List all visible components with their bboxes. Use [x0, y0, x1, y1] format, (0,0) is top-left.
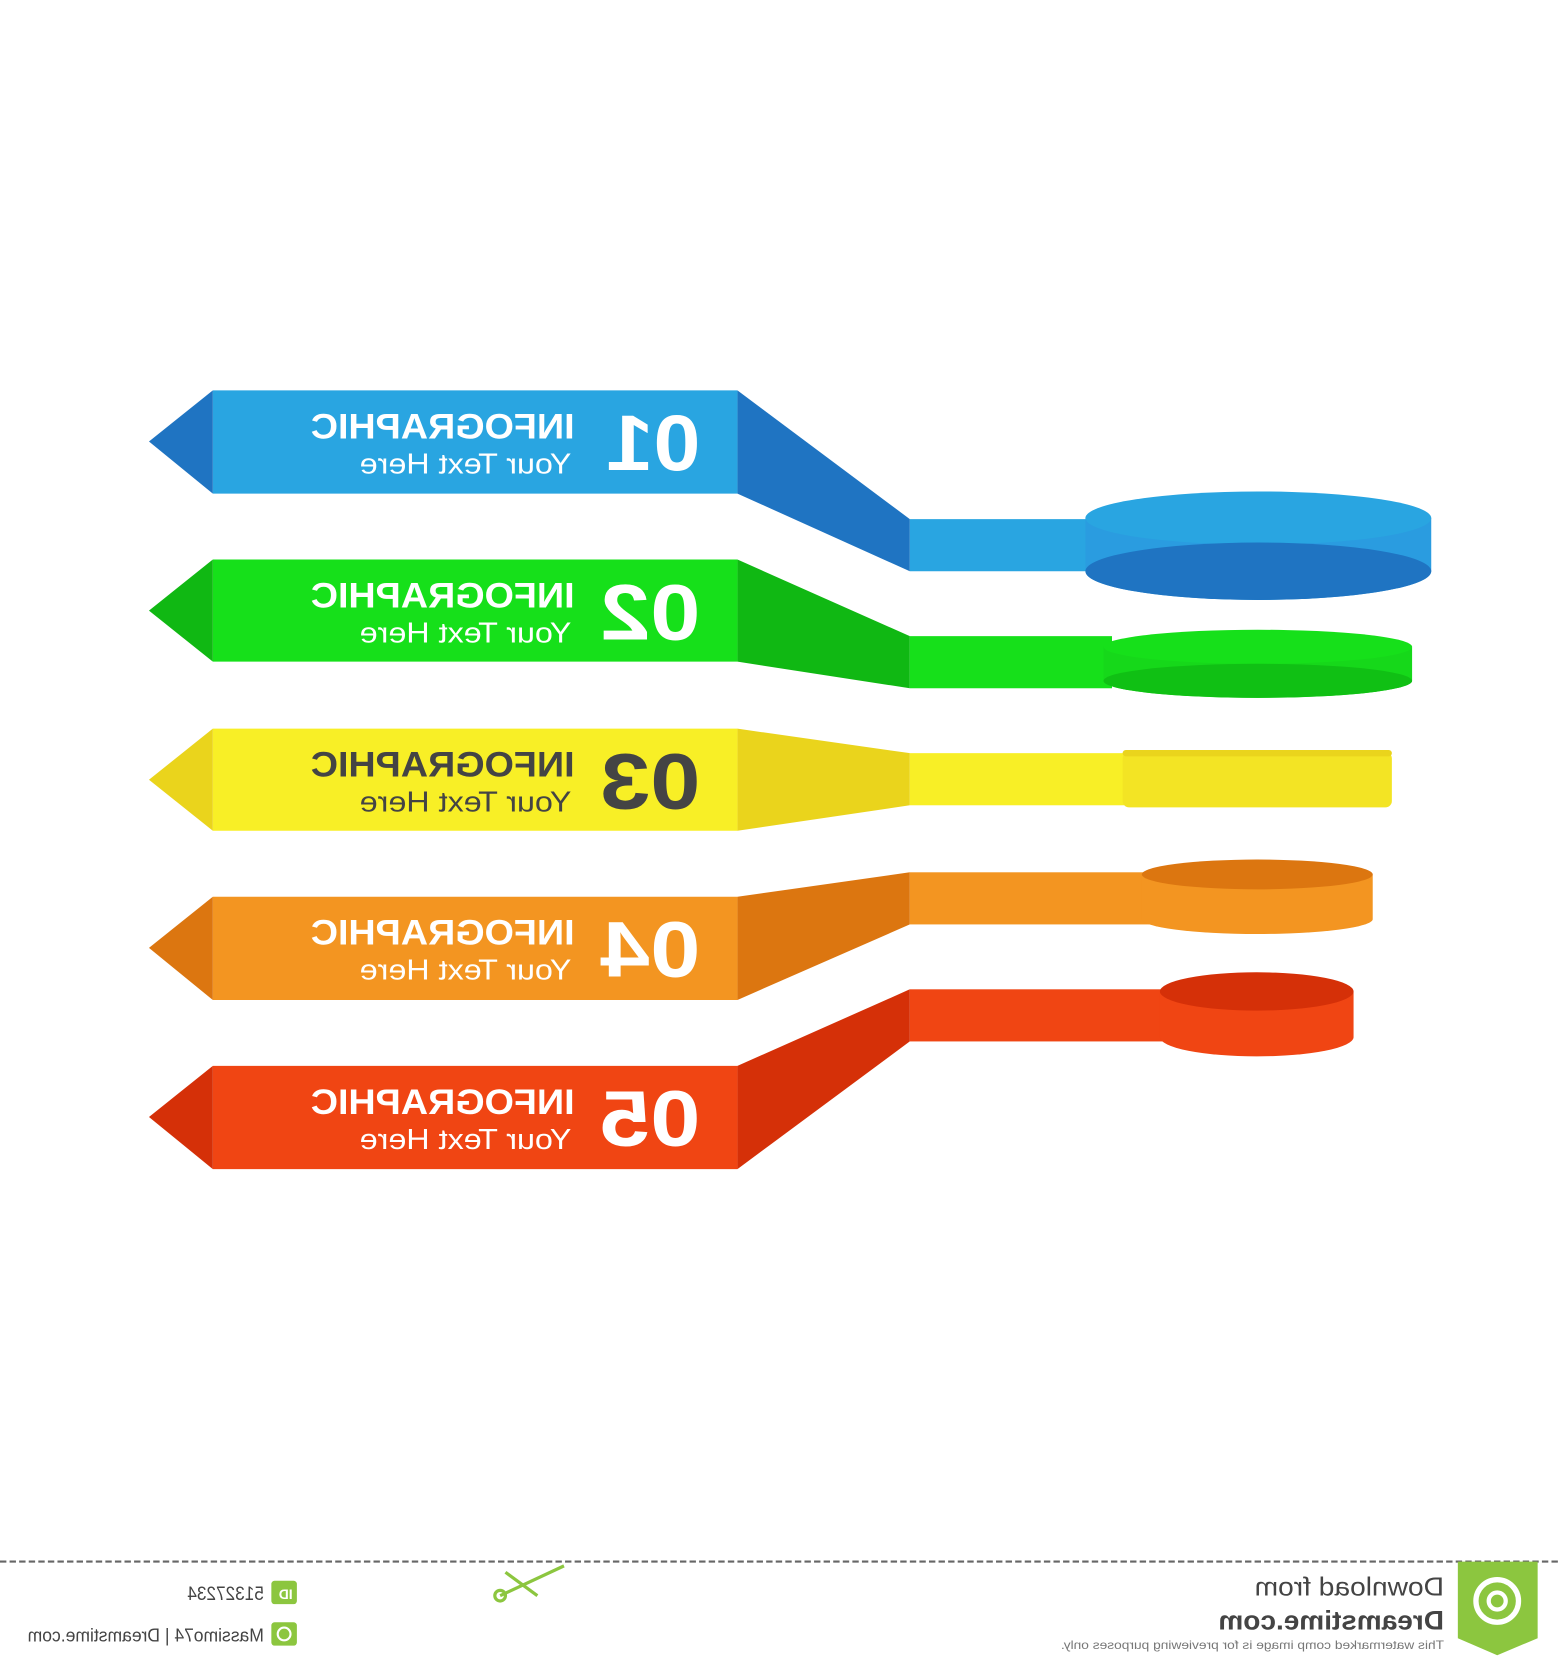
- connector 02: [737, 560, 910, 688]
- disclaimer: This watermarked comp image is for previewing purposes only.: [1061, 1639, 1444, 1652]
- cylinder 03: [1123, 750, 1392, 807]
- box 02: [213, 560, 737, 662]
- number 03: 03: [600, 737, 700, 825]
- dreamstime text: Dreamstime.com: [1218, 1606, 1444, 1636]
- cylinder 02: [1103, 630, 1412, 698]
- subtitle 04: Your Text Here: [360, 955, 571, 987]
- row 03: yellow: [149, 729, 1392, 831]
- box 05: [213, 1066, 737, 1169]
- download text: Download from: [1255, 1574, 1444, 1602]
- cylinder 05: [1160, 972, 1354, 1056]
- logo badge: [1458, 1562, 1538, 1655]
- connector 01: [737, 390, 910, 571]
- tip 02: [149, 560, 213, 662]
- connector 04: [737, 872, 910, 1000]
- author badge: Massimo74 | Dreamstime.com: [28, 1625, 264, 1645]
- scissors icon: [495, 1566, 564, 1601]
- strip 01: [910, 519, 1101, 571]
- tip 04: [149, 897, 213, 1000]
- box 04: [213, 897, 737, 1000]
- row 01: blue: [149, 390, 1431, 600]
- footer watermark: [28, 1562, 1538, 1655]
- strip 05: [910, 989, 1165, 1041]
- strip 03: [910, 753, 1128, 805]
- row 04: orange: [149, 860, 1373, 1000]
- box 01: [213, 390, 737, 494]
- connector 05: [737, 989, 910, 1169]
- id badge: 51327234: [187, 1584, 264, 1605]
- title 05: INFOGRAPHIC: [311, 1083, 575, 1122]
- connector 03: [737, 729, 910, 831]
- number 02: 02: [600, 568, 700, 656]
- tip 03: [149, 729, 213, 831]
- id badge: ID: [279, 1586, 293, 1602]
- number 05: 05: [600, 1075, 700, 1163]
- box 03: [213, 729, 737, 831]
- cylinder 01: [1085, 491, 1431, 600]
- tip 01: [149, 390, 213, 494]
- id badge: [187, 1581, 297, 1605]
- subtitle 05: Your Text Here: [360, 1124, 571, 1156]
- subtitle 02: Your Text Here: [360, 618, 571, 650]
- row 02: green: [149, 560, 1412, 698]
- cylinder 04: [1142, 860, 1373, 934]
- subtitle 01: Your Text Here: [360, 448, 571, 480]
- title 02: INFOGRAPHIC: [311, 576, 575, 615]
- row 05: red: [149, 972, 1354, 1169]
- strip 04: [910, 872, 1149, 924]
- title 01: INFOGRAPHIC: [311, 407, 575, 446]
- title 04: INFOGRAPHIC: [311, 914, 575, 953]
- title 03: INFOGRAPHIC: [311, 746, 575, 785]
- strip 02: [910, 636, 1112, 688]
- subtitle 03: Your Text Here: [360, 787, 571, 819]
- number 01: 01: [607, 399, 700, 487]
- tip 05: [149, 1066, 213, 1169]
- number 04: 04: [600, 906, 700, 994]
